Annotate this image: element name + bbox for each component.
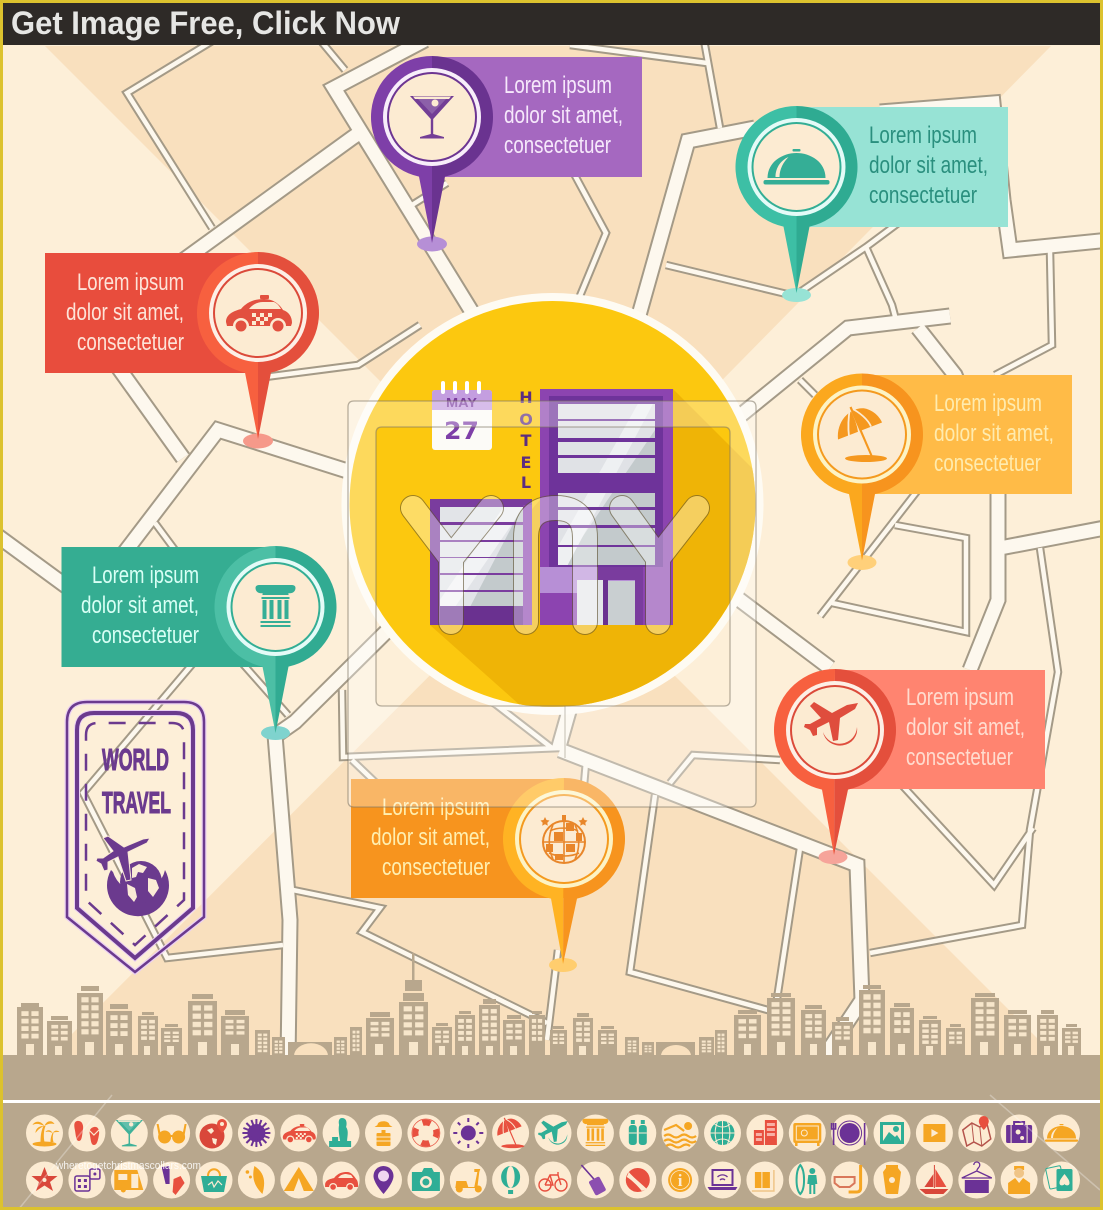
panel text: beach: Lorem ipsum — [934, 390, 1042, 417]
map pin: restaurant — [735, 106, 1008, 302]
entrance — [598, 567, 643, 625]
site watermark text: wheretogetchristmascollars.com — [55, 1160, 201, 1172]
calendar — [432, 383, 492, 450]
icon: sun — [450, 1114, 487, 1152]
icon: taxi — [280, 1114, 317, 1152]
icon: camera — [407, 1162, 444, 1198]
doors — [26, 1042, 1074, 1055]
hotel vertical sign — [519, 388, 533, 492]
icon: luggage cart — [746, 1162, 783, 1198]
icon: bellboy — [1001, 1162, 1038, 1198]
icon: cloche — [1043, 1114, 1080, 1152]
map pin: landmarks — [62, 546, 337, 740]
icon row 1 — [26, 1114, 1080, 1152]
pin marker: beach — [801, 374, 923, 570]
watermark — [348, 401, 756, 807]
badge: world travel stamp — [67, 702, 204, 972]
badge: world travel stamp: TRAVEL — [102, 785, 171, 820]
icon: dice — [68, 1162, 105, 1198]
icon: snorkel mask — [831, 1162, 868, 1198]
icon: disco ball — [540, 815, 588, 863]
icon: swim fins — [153, 1162, 190, 1198]
icon: hot air balloon — [492, 1162, 529, 1198]
icon: scuba tanks — [619, 1114, 656, 1152]
panel text: restaurant: Lorem ipsum — [869, 122, 977, 149]
icon: picture — [874, 1114, 910, 1152]
central hotel circle — [342, 293, 764, 715]
main tower — [540, 389, 673, 625]
icon: playing cards — [1043, 1162, 1080, 1198]
calendar month: MAY — [446, 395, 477, 410]
icon: hotels — [746, 1114, 783, 1152]
panel text: restaurant: dolor sit amet, — [869, 152, 988, 179]
top banner — [0, 3, 1103, 45]
banner text: Get Image Free, Click Now — [11, 5, 400, 41]
icon: safe — [789, 1114, 826, 1152]
map pin: cocktail — [371, 56, 642, 252]
icon: plate and cutlery — [831, 1114, 868, 1152]
icon: location pin — [365, 1162, 402, 1198]
panel text: nightlife: Lorem ipsum — [382, 794, 490, 821]
watermark letters — [413, 508, 697, 622]
icon: laptop wifi — [704, 1162, 741, 1198]
icon: fish — [238, 1162, 275, 1198]
icon: plane — [534, 1114, 572, 1152]
icon: scooter — [450, 1162, 487, 1198]
icon: tent — [280, 1162, 317, 1198]
icon: info — [662, 1162, 699, 1198]
panel text: beach: dolor sit amet, — [934, 420, 1054, 447]
hotel vertical sign: T — [521, 431, 532, 450]
panel text: beach: consectetuer — [934, 450, 1041, 477]
hotel building — [430, 389, 673, 625]
panel text: cocktail: consectetuer — [504, 132, 611, 159]
pin marker: nightlife — [503, 778, 625, 972]
map pin: beach — [801, 374, 1072, 570]
icon: net globe — [704, 1114, 741, 1152]
icon: car — [323, 1162, 360, 1198]
panel text: flights: dolor sit amet, — [906, 714, 1025, 741]
icon: caravan — [111, 1162, 148, 1198]
panel text: flights: Lorem ipsum — [906, 684, 1014, 711]
panel text: cocktail: dolor sit amet, — [504, 102, 623, 129]
icon: statue — [323, 1114, 360, 1152]
panel text: taxi: dolor sit amet, — [66, 299, 184, 326]
icon: sunglasses — [153, 1114, 190, 1152]
icon: sea urchin — [238, 1114, 275, 1152]
icon: beach ball — [619, 1162, 656, 1198]
icon: beach bag — [196, 1162, 232, 1198]
icon: flip-flops — [68, 1114, 105, 1152]
hotel vertical sign: O — [519, 410, 533, 429]
badge globe and plane — [96, 836, 169, 916]
hotel vertical sign: L — [521, 473, 531, 492]
pin marker: restaurant — [735, 106, 858, 302]
pin marker: landmarks — [214, 546, 337, 740]
pin marker: cocktail — [371, 56, 493, 252]
icon: starfish — [26, 1162, 63, 1198]
panel text: nightlife: dolor sit amet, — [371, 824, 490, 851]
panel text: landmarks: Lorem ipsum — [92, 562, 199, 589]
left wing — [430, 499, 532, 625]
city buildings — [17, 953, 1081, 1056]
icon: surfer — [789, 1162, 826, 1198]
map pin: taxi — [45, 252, 319, 448]
map pin: nightlife — [351, 778, 625, 972]
icon: trolley suitcase — [577, 1162, 614, 1198]
icon: lifebuoy — [407, 1114, 444, 1152]
skyline — [0, 953, 1103, 1210]
panel text: landmarks: consectetuer — [92, 622, 199, 649]
icon: suitcase — [1001, 1114, 1038, 1152]
icon: column — [577, 1114, 614, 1152]
long shadow — [430, 389, 756, 707]
windows — [20, 993, 1079, 1054]
icon: bicycle — [534, 1162, 572, 1198]
icon: hanger towel — [958, 1162, 995, 1198]
icon: video player — [916, 1114, 953, 1152]
panel text: restaurant: consectetuer — [869, 182, 977, 209]
icon: parasol — [492, 1114, 529, 1152]
icon: info: i — [678, 1171, 683, 1190]
ground strip — [0, 1055, 1103, 1210]
bridges — [288, 1042, 695, 1056]
hotel vertical sign: E — [521, 453, 531, 472]
panel text: cocktail: Lorem ipsum — [504, 72, 612, 99]
panel text: flights: consectetuer — [906, 744, 1013, 771]
icon row 2 — [26, 1162, 1080, 1198]
icon: sailboat — [916, 1162, 953, 1198]
panel text: nightlife: consectetuer — [382, 854, 490, 881]
icon: globe pin — [196, 1114, 232, 1152]
hotel vertical sign: H — [519, 388, 533, 407]
icon: map — [958, 1114, 995, 1152]
calendar date: 27 — [444, 417, 479, 445]
icon: sunscreen — [874, 1162, 910, 1198]
icon: martini — [111, 1114, 148, 1152]
panel text: taxi: consectetuer — [77, 329, 184, 356]
panel text: landmarks: dolor sit amet, — [81, 592, 199, 619]
pin marker: flights — [774, 669, 896, 864]
icon: swimmer — [662, 1114, 699, 1152]
badge text: WORLD — [102, 742, 169, 777]
icon: hat and luggage — [365, 1114, 402, 1152]
pin marker: taxi — [197, 252, 319, 448]
icon: palm trees — [26, 1114, 63, 1152]
panel text: taxi: Lorem ipsum — [77, 269, 184, 296]
map pin: flights — [774, 669, 1045, 864]
